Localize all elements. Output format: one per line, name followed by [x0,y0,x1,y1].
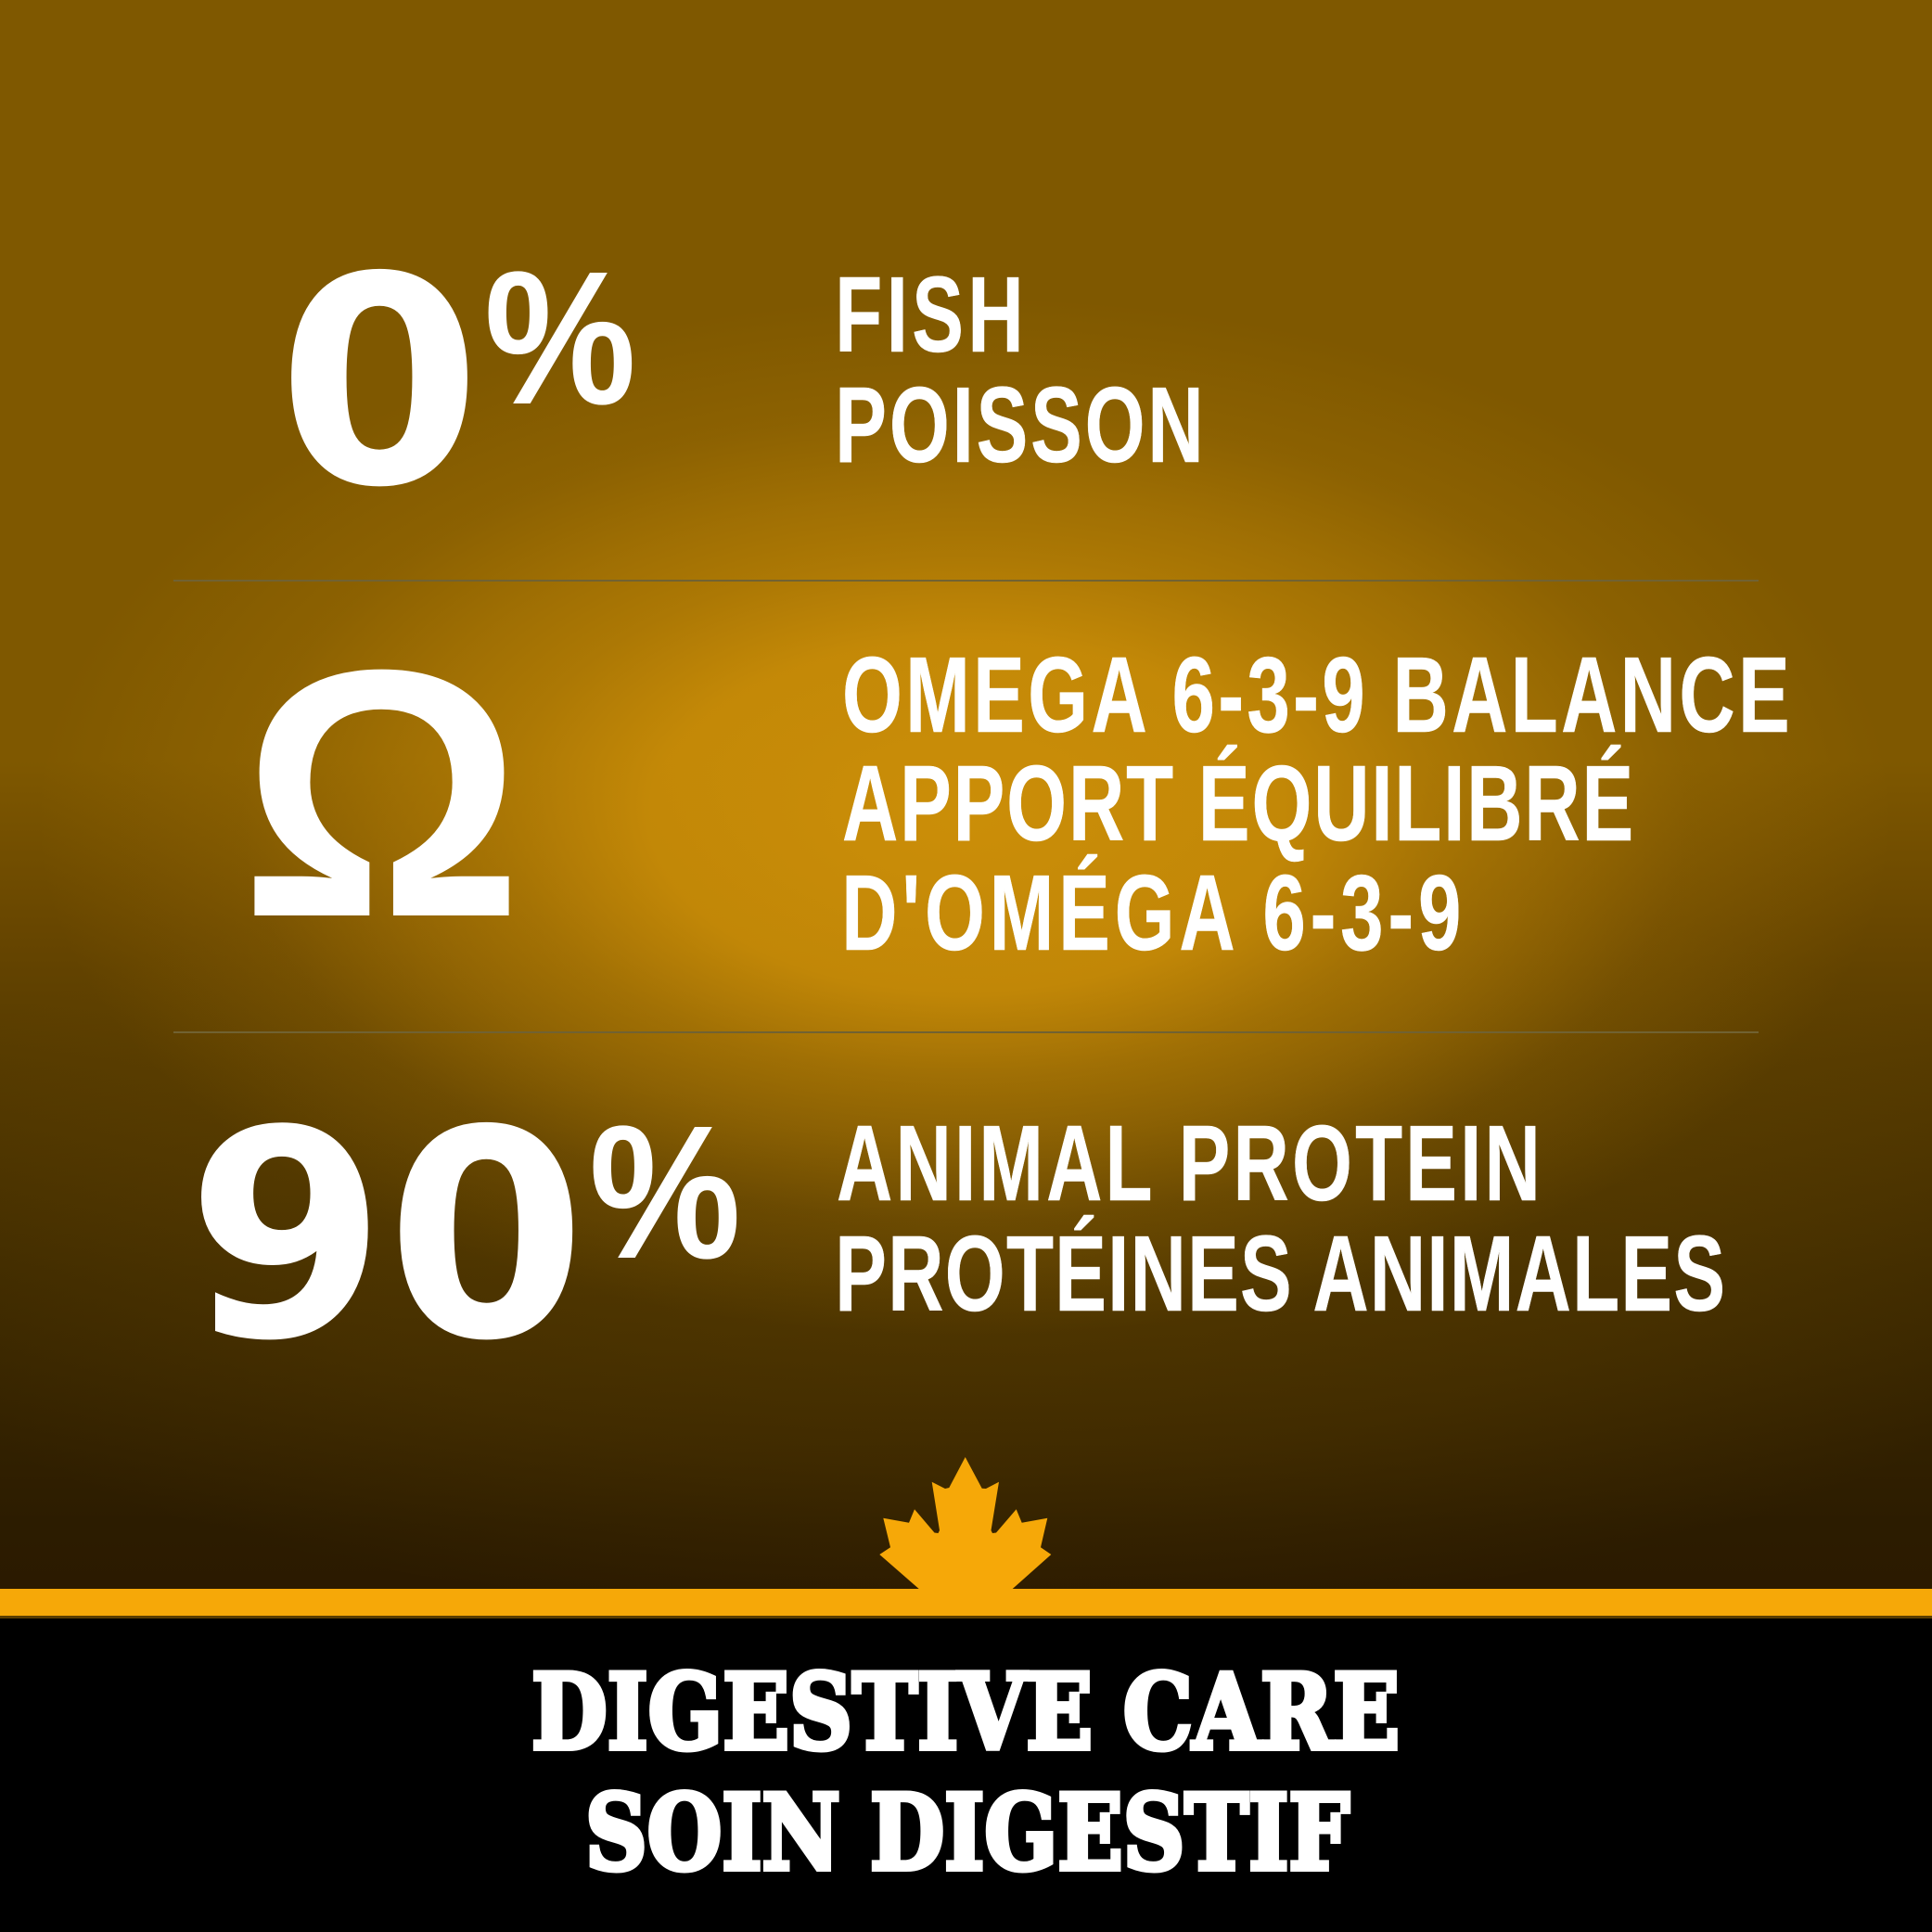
label: animal protein: PROTÉINES ANIMALES [835,1214,1725,1334]
big number 0: 0 [277,216,481,551]
label: omega balance: OMEGA 6-3-9 BALANCE [842,636,1790,755]
row: omega balance [240,596,1790,991]
label: animal protein: ANIMAL PROTEIN [837,1105,1541,1223]
footer band [0,1589,1932,1932]
footer title [531,1653,1400,1894]
omega symbol: Ω [240,596,523,991]
label: fish / poisson [835,256,1204,485]
label: omega balance: APPORT ÉQUILIBRÉ [842,744,1633,864]
row: 0% fish [277,216,1204,551]
footer title: DIGESTIVE CARE [531,1653,1400,1773]
label: omega balance: D'OMÉGA 6-3-9 [841,853,1461,973]
label: fish / poisson: POISSON [835,366,1204,485]
big number 90: 90 [186,1069,586,1404]
label: animal protein [835,1105,1725,1334]
icon: maple leaf [879,1457,1051,1619]
row: 90% animal protein [186,1069,1725,1404]
divider lines [173,580,1759,1033]
label: fish / poisson: FISH [835,256,1024,375]
label: omega balance [841,636,1790,973]
footer title: SOIN DIGESTIF [585,1773,1350,1894]
percent sign: % [589,1086,741,1299]
percent sign: % [484,232,636,444]
